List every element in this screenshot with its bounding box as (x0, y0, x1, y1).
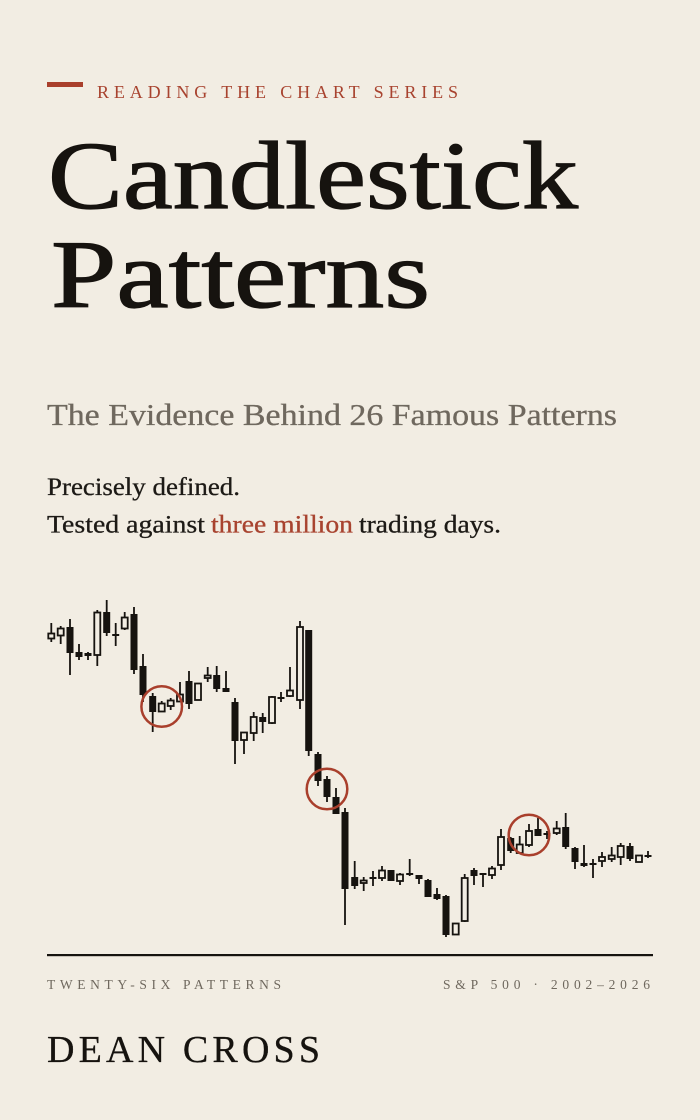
title: Patterns (51, 221, 430, 328)
tagline (47, 474, 501, 538)
baseline rule (47, 954, 653, 956)
series label: READING THE CHART SERIES (97, 82, 458, 102)
footer right label: S&P 500 · 2002–2026 (443, 977, 650, 992)
pattern highlight circle 3 (509, 815, 549, 855)
tagline: three million (211, 512, 354, 538)
hollow bullish bodies (48, 612, 642, 934)
tagline: Precisely defined. (47, 474, 240, 501)
author: DEAN CROSS (47, 1029, 320, 1071)
candlestick chart (48, 600, 651, 937)
tagline: trading days. (359, 512, 501, 538)
title (48, 122, 578, 328)
subtitle: The Evidence Behind 26 Famous Patterns (47, 397, 617, 432)
pattern highlight circle 2 (307, 769, 347, 809)
pattern highlight circle 1 (141, 686, 182, 727)
tagline: Tested against (47, 512, 205, 538)
footer left label: TWENTY-SIX PATTERNS (47, 977, 281, 992)
filled bearish bodies (67, 612, 651, 934)
eyebrow accent bar (47, 82, 83, 87)
title: Candlestick (48, 122, 578, 229)
